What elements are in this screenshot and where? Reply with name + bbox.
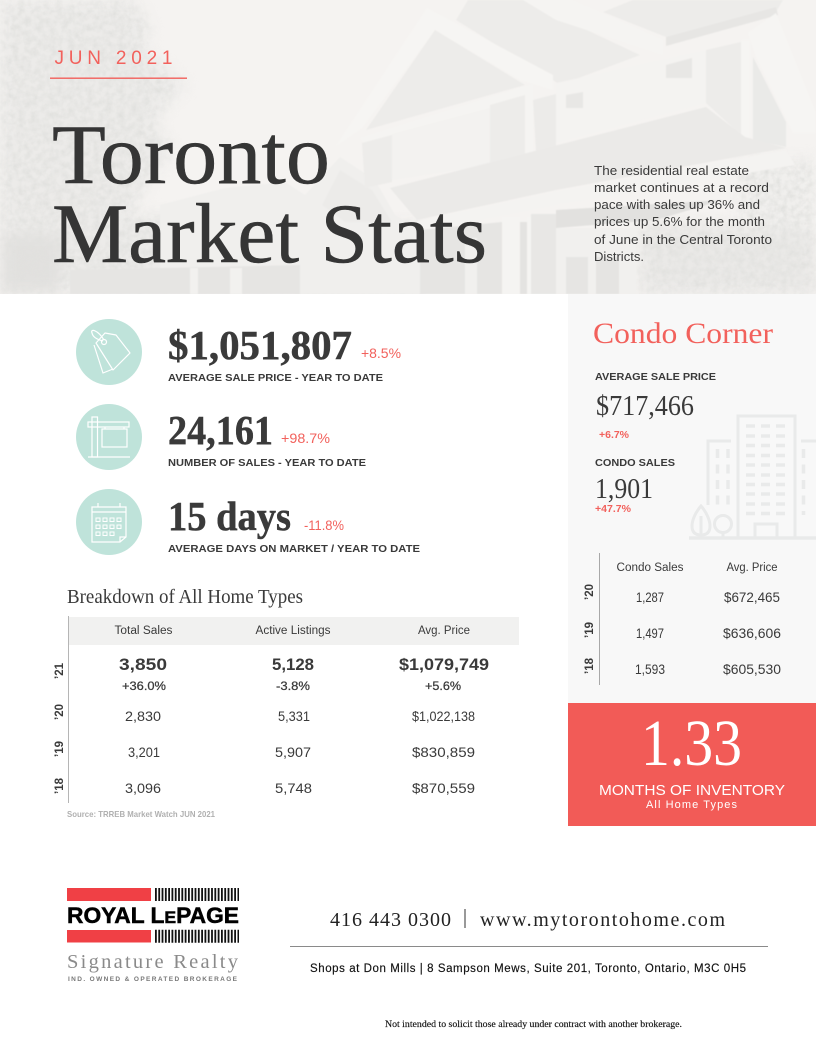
- row 2018: [54, 777, 475, 796]
- dormer and right wall: [556, 42, 743, 143]
- condo table: ’20: [584, 584, 596, 600]
- row 2020: ’20: [54, 704, 66, 720]
- condo heading: Condo Corner: [593, 317, 773, 350]
- contact line: 416 443 0300: [330, 909, 451, 931]
- stat: number of sales: [76, 404, 366, 470]
- row 2020: 2,830: [125, 708, 161, 724]
- intro text: market continues at a record: [594, 181, 769, 195]
- row 2021: -3.8%: [276, 681, 310, 693]
- condo table: $605,530: [723, 661, 781, 677]
- intro text: prices up 5.6% for the month: [594, 215, 765, 229]
- stat: days on market: 15 days: [168, 493, 291, 539]
- row 2019: $830,859: [412, 744, 475, 760]
- condo table: ’18: [584, 657, 596, 674]
- row 2021: ’21: [54, 662, 66, 679]
- intro text: [594, 164, 772, 264]
- intro text: The residential real estate: [594, 164, 749, 178]
- row 2019: 3,201: [128, 744, 160, 760]
- condo sales: 1,901: [595, 473, 653, 505]
- disclaimer: Not intended to solicit those already under contract with another brokerage.: [385, 1020, 682, 1030]
- logo: royal lepage: Signature Realty: [67, 951, 239, 973]
- stat: average sale price: AVERAGE SALE PRICE - YEAR TO DATE: [168, 372, 383, 384]
- intro text: of June in the Central Toronto: [594, 233, 772, 247]
- stat: number of sales: 24,161: [168, 407, 273, 453]
- row 2019: 5,907: [275, 744, 311, 760]
- row 2020: 5,331: [278, 708, 310, 724]
- row 2018: 3,096: [125, 780, 161, 796]
- table header: Avg. Price: [418, 625, 470, 637]
- condo table: Avg. Price: [726, 562, 778, 574]
- table header: Total Sales: [114, 625, 173, 637]
- row 2021: +5.6%: [425, 681, 461, 693]
- row 2018: ’18: [54, 777, 66, 794]
- row 2021: $1,079,749: [399, 655, 489, 674]
- condo sales: CONDO SALES: [595, 457, 675, 469]
- porch: [556, 200, 723, 228]
- row 2021: 3,850: [119, 655, 167, 674]
- row 2021: [54, 655, 489, 693]
- row 2020: [54, 704, 475, 724]
- condo table: 1,287: [636, 589, 664, 605]
- condo table: Condo Sales: [616, 562, 684, 574]
- contact line: [330, 909, 725, 931]
- condo sales: +47.7%: [595, 503, 632, 515]
- condo average sale price: [595, 371, 716, 441]
- stat: days on market: [76, 489, 420, 555]
- condo table: [584, 553, 781, 685]
- lower roof: [390, 107, 786, 220]
- intro text: Districts.: [594, 250, 644, 264]
- upper roofs: [456, 0, 640, 85]
- header background: faded house photo: [0, 0, 816, 294]
- panel: condo corner: [568, 294, 816, 703]
- panel: months of inventory: MONTHS OF INVENTORY: [599, 783, 785, 799]
- logo: royal lepage: ROYAL LEPAGE: [67, 903, 239, 928]
- title: Market Stats: [52, 187, 487, 281]
- source note: Source: TRREB Market Watch JUN 2021: [67, 809, 215, 819]
- stat: number of sales: +98.7%: [281, 430, 330, 446]
- condo table: $636,606: [723, 625, 781, 641]
- row 2018: $870,559: [412, 780, 475, 796]
- table header: [114, 625, 470, 637]
- neighbouring house: [160, 218, 419, 292]
- table: all home types: [54, 616, 519, 803]
- icon: price tags: [76, 319, 142, 385]
- condo average sale price: AVERAGE SALE PRICE: [595, 371, 716, 383]
- heading: breakdown: Breakdown of All Home Types: [67, 586, 303, 608]
- panel: months of inventory: [568, 703, 816, 826]
- condo table: ’19: [584, 622, 596, 638]
- panel: months of inventory: All Home Types: [646, 799, 738, 811]
- condo table: 1,593: [635, 661, 665, 677]
- panel: months of inventory: 1.33: [641, 707, 742, 780]
- stat: average sale price: +8.5%: [361, 345, 401, 361]
- stat: average sale price: $1,051,807: [168, 322, 352, 368]
- condo average sale price: $717,466: [596, 390, 694, 422]
- title: [52, 108, 487, 281]
- intro text: pace with sales up 36% and: [594, 198, 760, 212]
- condo average sale price: +6.7%: [599, 429, 630, 441]
- condo table: $672,465: [724, 589, 780, 605]
- row 2021: 5,128: [272, 655, 314, 674]
- date label: JUN 2021: [54, 48, 172, 69]
- icon: calendar: [76, 489, 142, 555]
- title: Toronto: [52, 108, 330, 202]
- date label: [50, 48, 187, 79]
- front gable: [518, 58, 552, 78]
- row 2021: +36.0%: [122, 681, 166, 693]
- icon: for sale sign: [76, 404, 142, 470]
- contact line: www.mytorontohome.com: [480, 909, 725, 931]
- row 2019: [54, 741, 475, 760]
- logo: royal lepage: IND. OWNED & OPERATED BROKERAGE: [68, 976, 238, 983]
- icon: condo buildings: [689, 416, 816, 538]
- address: Shops at Don Mills | 8 Sampson Mews, Suite 201, Toronto, Ontario, M3C 0H5: [310, 963, 746, 975]
- logo: royal lepage: [67, 888, 239, 983]
- left tree and bushes: [0, 0, 816, 294]
- row 2018: 5,748: [275, 780, 312, 796]
- condo sales: [595, 457, 675, 515]
- row 2019: ’19: [54, 741, 66, 757]
- row 2020: $1,022,138: [412, 708, 475, 724]
- stat: number of sales: NUMBER OF SALES - YEAR TO DATE: [168, 457, 366, 469]
- stat: days on market: AVERAGE DAYS ON MARKET / YEAR TO DATE: [168, 543, 420, 555]
- stat: average sale price: [76, 319, 401, 385]
- stat: days on market: -11.8%: [304, 517, 344, 533]
- table header: Active Listings: [256, 625, 331, 637]
- condo table: 1,497: [636, 625, 664, 641]
